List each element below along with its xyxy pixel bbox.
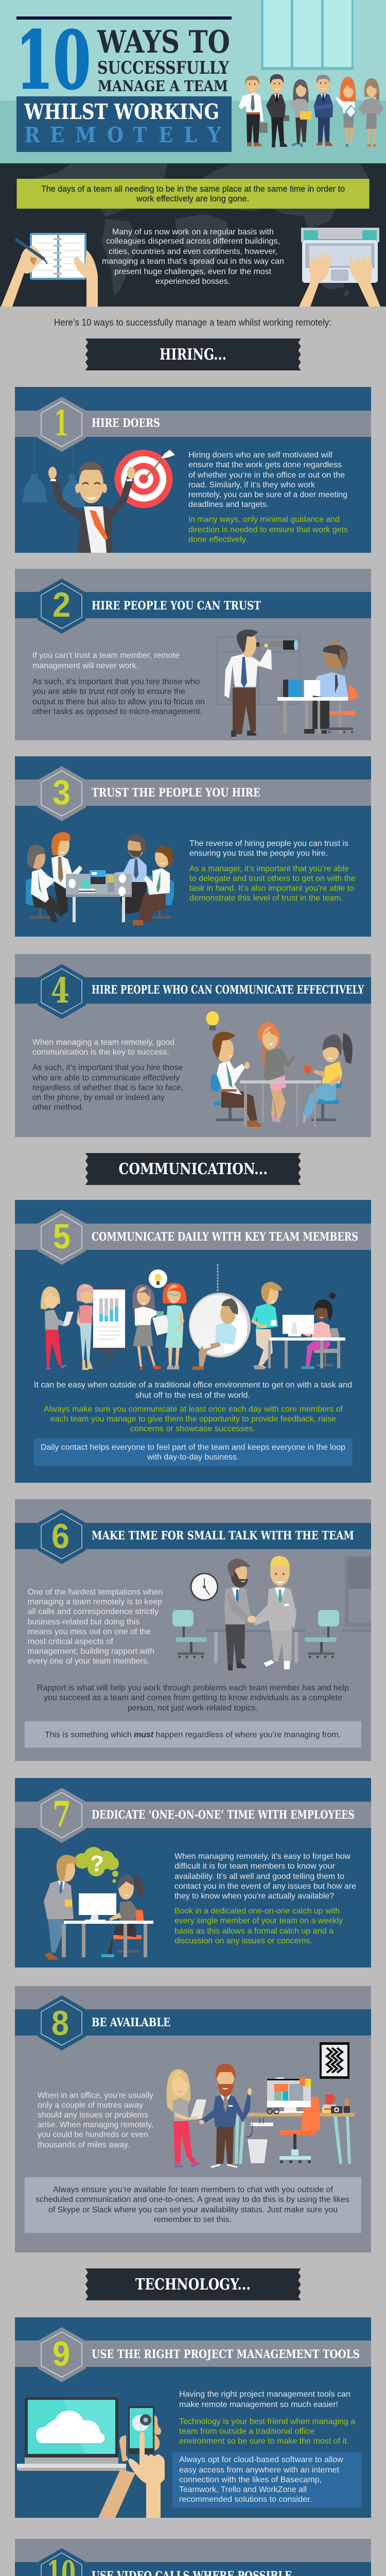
body text: The reverse of hiring people you can trust is xyxy=(189,839,348,848)
body text: contact you in the event of any issues but how are xyxy=(174,1882,356,1891)
manager xyxy=(44,1855,78,1960)
wall picture xyxy=(320,2042,349,2079)
body text: When in an office, you’re usually xyxy=(38,2091,153,2100)
highlight box: Always ensure you’re available for team members to chat with you outside of xyxy=(53,2185,334,2194)
section banner: hiring xyxy=(85,338,301,370)
highlight box: Always opt for cloud-based software to allow xyxy=(179,2455,343,2464)
heading band xyxy=(15,964,371,1019)
woman xyxy=(101,1874,144,1957)
power strip and bin xyxy=(246,2119,273,2163)
title number 10: 10 xyxy=(16,14,91,107)
heading band xyxy=(15,1788,371,1843)
desk objects xyxy=(322,2094,350,2113)
icon: bulb in speech circle xyxy=(149,1269,167,1288)
intro section xyxy=(0,163,386,307)
intro paragraph: colleagues dispersed across different buildings, xyxy=(106,237,280,246)
body text: One of the hardest temptations when xyxy=(28,1588,163,1597)
highlight box xyxy=(34,1438,352,1466)
woman purple hair xyxy=(132,1284,171,1369)
title block: whilst working remotely: REMOTELY xyxy=(24,123,221,147)
body text: When managing remotely, it’s easy to forget how xyxy=(174,1852,350,1861)
chair left xyxy=(172,1610,207,1658)
body text xyxy=(37,1684,349,1713)
woman with laptop xyxy=(167,2069,206,2167)
body text: When managing a team remotely, good xyxy=(32,1038,174,1047)
icon: hands typing on laptop xyxy=(299,228,380,307)
heading band: 2 xyxy=(52,585,71,624)
highlight box: This is something which must happen regardless of where you’re managing from. xyxy=(45,1731,341,1739)
panel: 5 communicate daily xyxy=(15,1200,371,1483)
callout: days of a team: work effectively are long gone. xyxy=(136,194,249,204)
callout: days of a team xyxy=(16,179,370,209)
body text: person, not just work-related topics. xyxy=(128,1704,258,1713)
chair xyxy=(278,2097,320,2163)
body text xyxy=(38,2091,153,2149)
highlight box xyxy=(25,2177,361,2233)
icon: hands writing in notebook xyxy=(1,233,98,307)
person 4 xyxy=(314,75,333,146)
body text: arise. When managing remotely, xyxy=(38,2121,153,2129)
icon: light bulb xyxy=(206,1011,219,1030)
body text: direction is needed to ensure that work gets xyxy=(188,526,348,534)
section banner: communication: COMMUNICATION... xyxy=(118,1160,268,1178)
computer and desk xyxy=(62,1893,153,1957)
illustration: man with telescope and seated colleague xyxy=(217,630,358,737)
body text: other method. xyxy=(32,1103,84,1112)
section banner: communication xyxy=(85,1153,301,1185)
body text: shut off to the rest of the world. xyxy=(135,1391,250,1400)
person 6 xyxy=(358,78,383,147)
person 3 xyxy=(289,79,311,147)
body text: discussion on any issues or concerns. xyxy=(174,1937,312,1945)
highlight box: recommended solutions to consider. xyxy=(179,2495,312,2504)
highlight box: Teamwork, Trello and WorkZone all xyxy=(179,2485,307,2494)
heading band: BE AVAILABLE xyxy=(92,2016,170,2029)
body text: they to know when you’re actually available? xyxy=(174,1892,334,1901)
body text: you succeed as a team and comes from getting to know individuals as a complete xyxy=(44,1693,342,1702)
heading band: 4 xyxy=(51,970,69,1011)
body text xyxy=(32,1038,183,1112)
body text: task in hand. It’s also important you’re able to xyxy=(189,884,354,893)
panel: 4 hire people who can communicate effectively xyxy=(15,954,371,1137)
highlight box: easy access from anywhere with an internet xyxy=(179,2466,340,2475)
thought bubble: ? xyxy=(90,1851,104,1876)
body text: who are able to communicate effectively xyxy=(32,1074,180,1082)
body text: Hiring doers who are self motivated will xyxy=(188,451,332,460)
body text: availability. It’s all well and good telling them to xyxy=(174,1872,344,1881)
body text: all calls and correspondence strictly xyxy=(28,1607,159,1616)
panel: 9 project management tools xyxy=(15,2317,371,2518)
whiteboard chart xyxy=(93,1287,125,1369)
highlight box xyxy=(25,1721,361,1748)
body text: deadlines and targets. xyxy=(188,500,269,509)
body text: environment so be sure to make the most of it. xyxy=(179,2437,349,2446)
body text: communication is the key to success. xyxy=(32,1048,169,1057)
body text xyxy=(174,1852,356,1945)
body text: every one of your team members. xyxy=(28,1657,149,1666)
body text: management will never work. xyxy=(32,662,138,670)
title: ways to: WAYS TO xyxy=(97,24,230,60)
heading band: 3 xyxy=(52,773,71,812)
body text: road. Similarly, if it’s they who work xyxy=(188,481,315,489)
body text: make remote management so much easier! xyxy=(179,2400,338,2409)
body text: ensure that the work gets done regardless xyxy=(188,461,342,469)
body text: most critical aspects of xyxy=(28,1637,114,1646)
illustration: team around a table xyxy=(26,832,174,925)
highlight box: scheduled communication and one-to-ones. A great way to do this is by using the likes xyxy=(36,2195,349,2204)
person 2 xyxy=(266,74,289,147)
woman red hair xyxy=(163,1283,186,1369)
heading band xyxy=(15,2548,371,2576)
intro paragraph: Many of us now work on a regular basis with xyxy=(112,228,274,236)
title block: whilst working remotely: WHILST WORKING xyxy=(24,99,219,124)
lead-in line: Here’s 10 ways to successfully manage a team whilst working remotely: xyxy=(54,317,331,328)
woman middle xyxy=(258,1022,295,1122)
body text xyxy=(188,451,348,544)
panel: 3 trust the people you hire xyxy=(15,756,371,937)
desk xyxy=(234,2113,355,2164)
body text: on the phone, by email or indeed any xyxy=(32,1093,165,1102)
body text: management; building rapport with xyxy=(28,1647,154,1656)
body text xyxy=(28,1588,163,1666)
highlight box: with day-to-day business. xyxy=(147,1453,239,1462)
body text: As such, it’s important that you hire those xyxy=(32,1063,183,1072)
panel: 7 dedicate one-on-one time xyxy=(15,1778,371,1968)
woman with laptop xyxy=(41,1286,74,1369)
section banner: hiring: HIRING... xyxy=(160,346,226,364)
body text: remotely, you can be sure of a doer meeting xyxy=(188,490,347,499)
heading band: DEDICATE ‘ONE-ON-ONE’ TIME WITH EMPLOYEES xyxy=(92,1808,355,1822)
body text: concerns or showcase successes. xyxy=(130,1425,255,1433)
body text: As such, it’s important that you hire those who xyxy=(32,677,200,686)
body text: each team you manage to give them the opportunity to provide feedback, raise xyxy=(50,1415,336,1423)
heading band xyxy=(15,1995,371,2050)
body text: done effectively. xyxy=(188,535,248,544)
woman right xyxy=(302,1033,353,1124)
heading band: USE THE RIGHT PROJECT MANAGEMENT TOOLS xyxy=(92,2348,360,2361)
panel: 1 hire doers xyxy=(15,387,371,553)
heading band: 9 xyxy=(52,2334,70,2374)
body text: every single member of your team on a weekly xyxy=(174,1917,343,1925)
highlight box xyxy=(172,2452,362,2507)
blond man xyxy=(252,1556,296,1669)
body text: ensuring you trust the people you hire. xyxy=(189,849,328,858)
panel: 2 hire people you can trust xyxy=(15,569,371,740)
world map background xyxy=(34,164,368,298)
illustration: office team xyxy=(41,1264,345,1370)
illustration: man celebrating by target xyxy=(22,437,175,553)
man standing with mug xyxy=(251,1282,282,1369)
woman at desk xyxy=(301,1293,340,1369)
heading band xyxy=(15,579,371,634)
heading band: 8 xyxy=(51,2004,69,2043)
heading band: HIRE PEOPLE YOU CAN TRUST xyxy=(92,599,261,613)
heading band xyxy=(15,766,371,821)
body text: team from outside a traditional office xyxy=(179,2427,314,2436)
monitor xyxy=(267,2078,311,2114)
highlight box: Daily contact helps everyone to feel part of the team and keeps everyone in the loop xyxy=(41,1443,345,1452)
body text xyxy=(34,1381,352,1433)
illustration: manager and employee at desk xyxy=(44,1847,153,1960)
bearded man xyxy=(199,2064,252,2168)
body text xyxy=(179,2390,355,2446)
body text: regardless of whether that is face to face, xyxy=(32,1083,183,1092)
panel: 6 make time for small talk xyxy=(15,1499,371,1761)
clock xyxy=(189,1573,218,1602)
title block: whilst working remotely xyxy=(16,96,232,152)
body text: difficult it is for team members to know your xyxy=(174,1862,336,1871)
body text: Technology is your best friend when managing a xyxy=(179,2417,355,2426)
heading band: 7 xyxy=(52,1794,71,1835)
person right brown hair xyxy=(133,846,173,925)
illustration: handshake in meeting room xyxy=(172,1556,371,1670)
body text: In many ways, only minimal guidance and xyxy=(188,515,340,524)
heading band: 6 xyxy=(51,1517,69,1556)
body text: output is there but also to allow you to focus on xyxy=(32,698,205,706)
chair right xyxy=(305,1610,339,1658)
body text: business-related but doing this xyxy=(28,1618,139,1626)
intro paragraph xyxy=(102,228,284,286)
panel: 8 be available xyxy=(15,1986,371,2252)
person 1 xyxy=(239,76,268,146)
team of six people xyxy=(239,74,383,147)
body text: of whether you’re in the office or out on the xyxy=(188,471,345,480)
illustration: three colleagues chatting xyxy=(206,1011,353,1127)
body text xyxy=(32,651,205,716)
intro paragraph: experienced bosses. xyxy=(155,277,230,286)
illustration: colleagues in home office xyxy=(167,2042,355,2168)
body text: means you miss out on one of the xyxy=(28,1628,151,1636)
intro paragraph: present huge challenges, even for the most xyxy=(114,267,272,276)
body text: thousands of miles away. xyxy=(38,2141,130,2149)
person 5 xyxy=(336,77,357,147)
title: successfully: SUCCESSFULLY xyxy=(97,58,230,78)
body text: Book in a dedicated one-on-one catch up with xyxy=(174,1907,340,1916)
egg chair with man xyxy=(189,1264,251,1370)
heading band: HIRE DOERS xyxy=(92,416,160,430)
thought bubble xyxy=(75,1847,119,1883)
highlight box: connection with the likes of Basecamp, xyxy=(179,2476,322,2484)
highlight box: of Skype or Slack where you can set your availability status. Just make sure you xyxy=(48,2206,338,2214)
heading band: 5 xyxy=(53,1217,71,1256)
heading band xyxy=(15,2327,371,2382)
section banner: technology xyxy=(85,2268,301,2300)
highlight box: remember to set this. xyxy=(154,2215,232,2224)
heading band xyxy=(15,397,371,452)
intro paragraph: managing a team that’s spread out in this way can xyxy=(102,257,284,266)
man seated xyxy=(211,1031,261,1127)
table xyxy=(206,1630,305,1663)
panel: 10 use video calls xyxy=(15,2539,371,2576)
heading band xyxy=(15,1509,371,1564)
body text: other tasks as opposed to micro-management. xyxy=(32,707,202,716)
body text: to delegate and trust others to get on with the xyxy=(189,874,356,883)
hero section xyxy=(0,0,386,163)
body text: As a manager, it’s important that you’re able xyxy=(189,865,349,873)
body text: you could be hundreds or even xyxy=(38,2130,148,2139)
body text: managing a team remotely is to keep xyxy=(28,1598,162,1606)
body text: demonstrate this level of trust in the team. xyxy=(189,894,343,903)
illustration: laptop and phone with cloud xyxy=(17,2397,165,2518)
body text: basis as this allows a formal catch up and a xyxy=(174,1927,334,1936)
woman pink hair xyxy=(77,1284,106,1370)
heading band: TRUST THE PEOPLE YOU HIRE xyxy=(92,786,260,800)
body text xyxy=(189,839,356,903)
heading band: 1 xyxy=(54,403,68,444)
body text: you are able to trust not only to ensure the xyxy=(32,687,185,696)
section banner: technology: TECHNOLOGY... xyxy=(135,2276,251,2294)
callout: days of a team: The days of a team all needing to be in the same place at the same time in order to xyxy=(41,184,345,194)
body text: should any issues or problems xyxy=(38,2111,148,2120)
body text: If you can’t trust a team member, remote xyxy=(32,651,180,660)
bearded man xyxy=(224,1558,252,1670)
body text: only a couple of metres away xyxy=(38,2101,143,2110)
heading band xyxy=(15,1210,371,1265)
heading band: COMMUNICATE DAILY WITH KEY TEAM MEMBERS xyxy=(92,1230,358,1244)
heading band: MAKE TIME FOR SMALL TALK WITH THE TEAM xyxy=(92,1529,354,1543)
window xyxy=(342,1556,371,1632)
intro paragraph: cities, countries and even continents, however, xyxy=(109,247,277,256)
title: manage a team: MANAGE A TEAM xyxy=(98,77,228,95)
body text: Always make sure you communicate at least once each day with core members of xyxy=(44,1405,343,1414)
body text: Having the right project management tools can xyxy=(179,2390,350,2399)
office window xyxy=(261,0,354,70)
person left xyxy=(27,845,65,922)
body text: Rapport is what will help you work through problems each team member has and help xyxy=(37,1684,349,1692)
person ginger xyxy=(51,832,82,914)
person bearded xyxy=(114,835,147,914)
body text: It can be easy when outside of a traditional office environment to get on with a task and xyxy=(34,1381,352,1389)
